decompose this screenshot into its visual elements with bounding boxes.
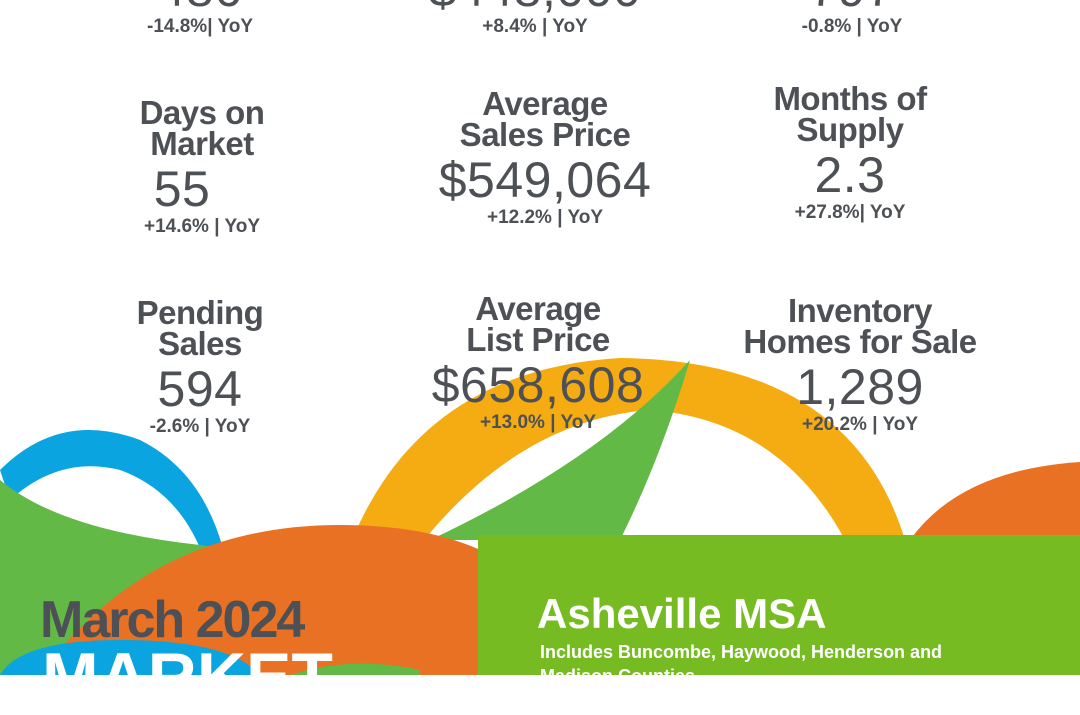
- stat: pending sales: [137, 294, 263, 437]
- shape: orange circle right: [910, 462, 1080, 560]
- stat: top row left: -14.8%| YoY: [147, 16, 253, 37]
- shape: yellow arch: [350, 358, 905, 545]
- stat: months of supply: Supply: [796, 111, 904, 148]
- stat: months of supply: Months of: [773, 80, 927, 117]
- stat: months of supply: 2.3: [814, 147, 886, 203]
- title: MARKET: MARKET: [42, 639, 333, 715]
- stat: top row left: [147, 0, 253, 37]
- stat: days on market: Market: [150, 125, 254, 162]
- stat: top row middle: +8.4% | YoY: [482, 16, 588, 37]
- stat: average list price: List Price: [466, 321, 610, 358]
- stat: average sales price: $549,064: [439, 152, 651, 208]
- stat: inventory: 1,289: [796, 359, 924, 415]
- stat: average list price: [432, 290, 644, 433]
- stat: top row middle: [429, 0, 641, 37]
- shape: green bottom: [290, 664, 420, 675]
- text: counties: Madison Counties: [540, 666, 695, 686]
- text: counties: Includes Buncombe, Haywood, Henderson and: [540, 642, 942, 662]
- stat: days on market: +14.6% | YoY: [144, 216, 260, 237]
- stat: days on market: [140, 94, 264, 237]
- stat: average list price: $658,608: [432, 357, 644, 413]
- panel: green info box: [478, 535, 1080, 675]
- shape: blue bottom left: [0, 640, 260, 675]
- heading: Asheville MSA: Asheville MSA: [537, 590, 826, 637]
- shape: orange hump: [40, 525, 500, 675]
- stat: average sales price: [439, 85, 651, 228]
- stat: average sales price: +12.2% | YoY: [487, 207, 603, 228]
- stat: inventory: [743, 292, 977, 435]
- stat: average sales price: Average: [482, 85, 608, 122]
- stat: months of supply: +27.8%| YoY: [795, 202, 905, 223]
- stat: months of supply: [773, 80, 928, 223]
- shape: blue arc left: [0, 430, 222, 548]
- stat: pending sales: Sales: [158, 325, 242, 362]
- stat: average sales price: Sales Price: [460, 116, 630, 153]
- stat: average list price: Average: [475, 290, 601, 327]
- stat: inventory: Inventory: [788, 292, 932, 329]
- stat: pending sales: 594: [158, 361, 242, 417]
- stat: pending sales: Pending: [137, 294, 263, 331]
- stat: days on market: Days on: [140, 94, 264, 131]
- stat: top row right: [802, 0, 902, 37]
- stat: average list price: +13.0% | YoY: [480, 412, 596, 433]
- shape: green leaf: [430, 360, 690, 540]
- stat: days on market: 55: [154, 161, 210, 217]
- shape: green swoosh left: [0, 480, 300, 675]
- title: March 2024: March 2024: [40, 591, 303, 649]
- stat: inventory: +20.2% | YoY: [802, 414, 918, 435]
- stat: top row right: -0.8% | YoY: [802, 16, 902, 37]
- stat: pending sales: -2.6% | YoY: [150, 416, 250, 437]
- text: counties: [540, 642, 942, 686]
- stat: inventory: Homes for Sale: [743, 323, 977, 360]
